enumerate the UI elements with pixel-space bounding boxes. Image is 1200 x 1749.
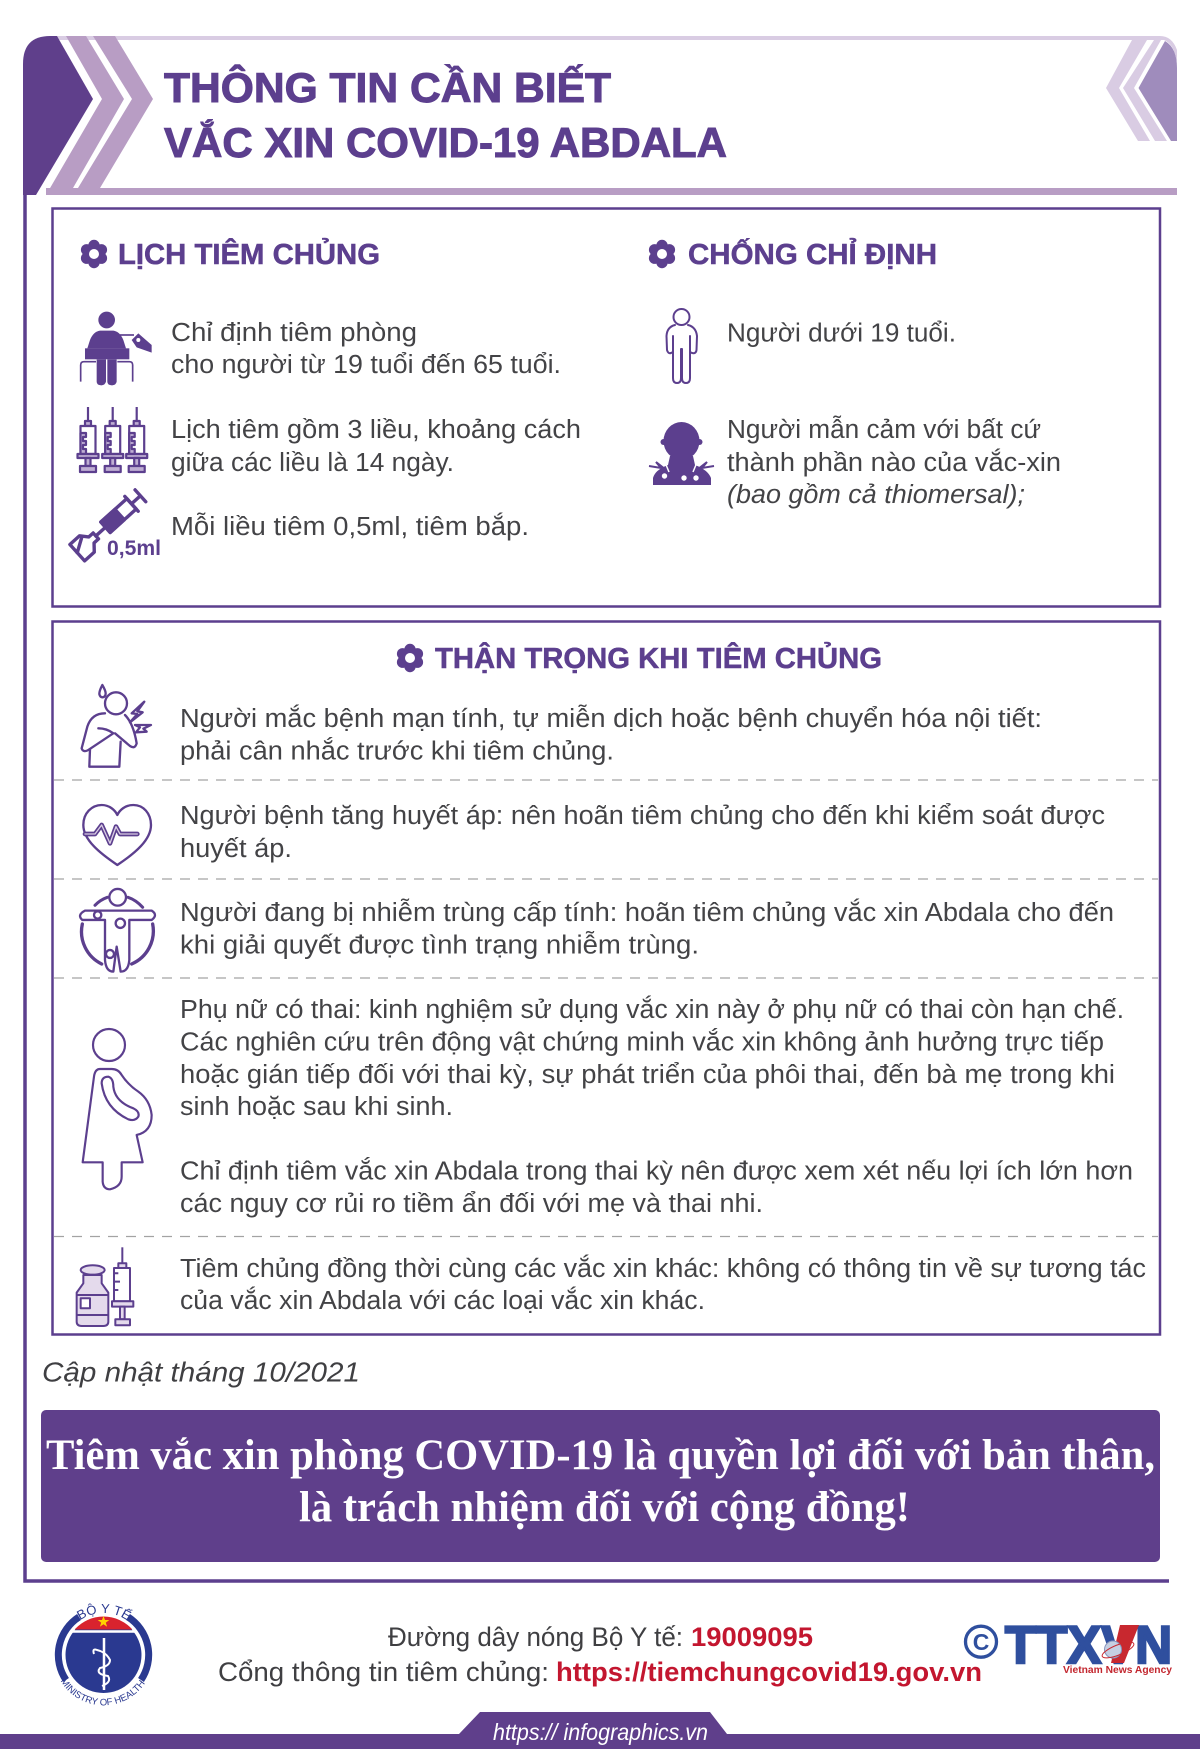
text: dose schedule: Lịch tiêm gồm 3 liều, khoảng cách — [171, 416, 581, 444]
text: hypertension — [180, 802, 1105, 863]
text: acute infection: Người đang bị nhiễm trùng cấp tính: hoãn tiêm chủng vắc xin Abdala cho đến — [180, 898, 1114, 927]
icon: flower bullet — [81, 240, 107, 268]
icon: vial and syringe — [77, 1247, 133, 1326]
hotline and portal text: Đường dây nóng Bộ Y tế: — [388, 1622, 683, 1652]
slogan banner — [41, 1410, 1160, 1562]
hotline and portal text: Cổng thông tin tiêm chủng: — [218, 1657, 549, 1687]
icon: flower bullet — [649, 240, 675, 268]
text: chronic illness: phải cân nhắc trước khi tiêm chủng. — [180, 736, 614, 766]
footer band: https:// infographics.vn — [493, 1719, 708, 1745]
left chevron stripes — [46, 36, 153, 195]
text: under 19: Người dưới 19 tuổi. — [727, 320, 956, 348]
logo: Ministry of Health: MINISTRY OF HEALTH — [60, 1680, 145, 1706]
icon: child outline — [666, 309, 697, 383]
text: indication — [171, 319, 561, 379]
text: pregnancy: Phụ nữ có thai: kinh nghiệm sử dụng vắc xin này ở phụ nữ có thai còn hạn chế. — [180, 995, 1124, 1024]
right chevron — [1106, 40, 1177, 141]
icon: figure with acute infection — [80, 889, 155, 972]
text: coadministration — [180, 1254, 1146, 1315]
panel: precautions — [52, 622, 1160, 1334]
text: hypertension: Người bệnh tăng huyết áp: nên hoãn tiêm chủng cho đến khi kiểm soát được — [180, 802, 1105, 830]
logo: Ministry of Health: BỘ Y TẾ — [76, 1603, 133, 1620]
logo: TTXVN: Vietnam News Agency — [1063, 1664, 1172, 1676]
text: hypersensitivity: Người mẫn cảm với bất cứ — [727, 415, 1041, 444]
text: pregnancy: Chỉ định tiêm vắc xin Abdala trong thai kỳ nên được xem xét nếu lợi ích lớn hơn — [180, 1156, 1133, 1186]
text: dose schedule: giữa các liều là 14 ngày. — [171, 449, 454, 477]
heading: contraindications: CHỐNG CHỈ ĐỊNH — [688, 237, 937, 271]
icon: heart with pulse — [83, 805, 151, 865]
text: pregnancy: sinh hoặc sau khi sinh. — [180, 1093, 453, 1121]
text: indication: Chỉ định tiêm phòng — [171, 319, 417, 347]
text: chronic illness: Người mắc bệnh mạn tính, tự miễn dịch hoặc bệnh chuyển hóa nội tiết: — [180, 704, 1042, 733]
text: pregnancy: các nguy cơ rủi ro tiềm ẩn đối với mẹ và thai nhi. — [180, 1190, 763, 1218]
heading: vaccination schedule: LỊCH TIÊM CHỦNG — [118, 237, 380, 271]
panel: schedule and contraindications — [52, 208, 1160, 606]
logo: Ministry of Health — [54, 1603, 152, 1706]
hotline and portal text: https://tiemchungcovid19.gov.vn — [556, 1657, 982, 1687]
text: pregnancy — [180, 995, 1133, 1218]
text: acute infection — [180, 898, 1114, 960]
slogan banner: là trách nhiệm đối với cộng đồng! — [299, 1484, 910, 1531]
text: coadministration: của vắc xin Abdala với các loại vắc xin khác. — [180, 1286, 705, 1315]
hotline and portal text — [218, 1622, 982, 1687]
icon: syringe and vial 0,5ml — [70, 488, 161, 561]
title: VẮC XIN COVID-19 ABDALA — [164, 118, 727, 166]
title — [164, 63, 727, 166]
title: THÔNG TIN CẦN BIẾT — [164, 63, 611, 111]
text: pregnancy: Các nghiên cứu trên động vật chứng minh vắc xin không ảnh hưởng trực tiếp — [180, 1028, 1104, 1056]
slogan banner: Tiêm vắc xin phòng COVID-19 là quyền lợi đối với bản thân, — [46, 1432, 1155, 1479]
icon: flower bullet — [397, 644, 423, 672]
top stripe — [57, 36, 1177, 62]
text: hypersensitivity: thành phần nào của vắc-xin — [727, 448, 1061, 477]
icon: syringe and vial 0,5ml: 0,5ml — [107, 537, 161, 560]
text: hypersensitivity: (bao gồm cả thiomersal); — [727, 481, 1025, 509]
text: indication: cho người từ 19 tuổi đến 65 tuổi. — [171, 351, 561, 379]
header banner — [23, 36, 1177, 195]
page frame — [25, 190, 1169, 1581]
text: hypertension: huyết áp. — [180, 835, 292, 863]
text: acute infection: khi giải quyết được tình trạng nhiễm trùng. — [180, 930, 699, 960]
left dark chevron — [23, 36, 93, 195]
icon: pregnant woman — [83, 1029, 152, 1189]
bottom stripe — [46, 188, 1177, 195]
icon: seated person receiving injection — [81, 312, 152, 385]
icon: allergic person — [649, 422, 714, 485]
text: dose schedule — [171, 416, 581, 477]
text: dose amount: Mỗi liều tiêm 0,5ml, tiêm bắp. — [171, 512, 529, 541]
hotline and portal text: 19009095 — [691, 1622, 813, 1652]
footer band — [0, 1712, 1200, 1749]
text: coadministration: Tiêm chủng đồng thời cùng các vắc xin khác: không có thông tin về sự tương tác — [180, 1254, 1146, 1283]
text: hypersensitivity — [727, 415, 1061, 509]
text: pregnancy: hoặc gián tiếp đối với thai kỳ, sự phát triển của phôi thai, đến bà mẹ trong khi — [180, 1061, 1115, 1089]
logo: TTXVN: TTXVN — [1005, 1616, 1172, 1675]
icon: three syringes — [78, 407, 147, 472]
heading: precautions: THẬN TRỌNG KHI TIÊM CHỦNG — [435, 641, 882, 675]
update date note: Cập nhật tháng 10/2021 — [42, 1356, 360, 1388]
icon: chronic illness person — [82, 685, 151, 767]
text: chronic illness — [180, 704, 1042, 766]
logo: TTXVN: C — [973, 1629, 989, 1655]
